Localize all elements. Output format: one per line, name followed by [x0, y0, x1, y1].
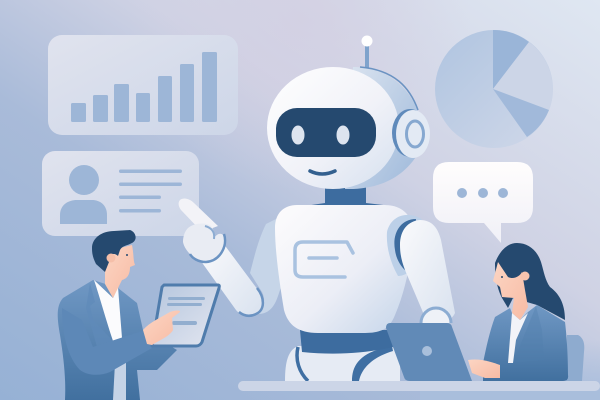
desk: [238, 381, 600, 400]
bar chart: [71, 52, 217, 122]
robot head: [267, 67, 399, 189]
robot right arm: [400, 220, 455, 323]
woman hair back: [495, 243, 565, 320]
robot pointing arm: [179, 199, 263, 316]
man lower shirt: [113, 363, 126, 400]
woman hands: [468, 359, 500, 378]
robot antenna: [362, 36, 372, 70]
panel: bar chart card: [48, 35, 238, 135]
man jacket arm: [62, 308, 152, 375]
speech bubble: [433, 162, 533, 243]
robot chest emblem: [295, 242, 353, 277]
man lapel: [86, 283, 113, 347]
man shirt: [94, 280, 122, 341]
desk and laptop: [238, 243, 600, 400]
robot torso: [275, 205, 412, 333]
robot rear arm: [250, 216, 290, 314]
robot eyes: [292, 126, 350, 144]
pie chart: [435, 30, 553, 148]
woman shirt: [508, 313, 528, 363]
robot pointing finger: [179, 199, 218, 232]
icon: person avatar: [60, 165, 107, 224]
robot neck: [308, 185, 388, 206]
robot belt: [300, 330, 393, 354]
woman face: [493, 262, 528, 320]
robot right hand: [421, 308, 451, 323]
man tablet: [152, 285, 219, 346]
man hand: [143, 310, 180, 345]
robot fist: [183, 224, 225, 261]
robot shoulder: [387, 215, 426, 276]
woman lapel: [513, 306, 544, 363]
robot lower legs: [285, 345, 400, 381]
robot head back: [345, 67, 420, 189]
person: man with tablet: [58, 230, 219, 400]
robot ear: [392, 109, 430, 158]
man head: [92, 230, 136, 298]
robot visor: [276, 108, 376, 157]
text lines: [119, 170, 182, 212]
chair: [566, 335, 584, 381]
woman suit: [483, 305, 568, 381]
panel: profile card: [42, 151, 199, 236]
laptop: [386, 323, 472, 381]
robot smile: [310, 171, 335, 174]
person: woman with laptop: [386, 243, 568, 381]
man suit: [58, 280, 177, 400]
robot: [179, 36, 455, 381]
